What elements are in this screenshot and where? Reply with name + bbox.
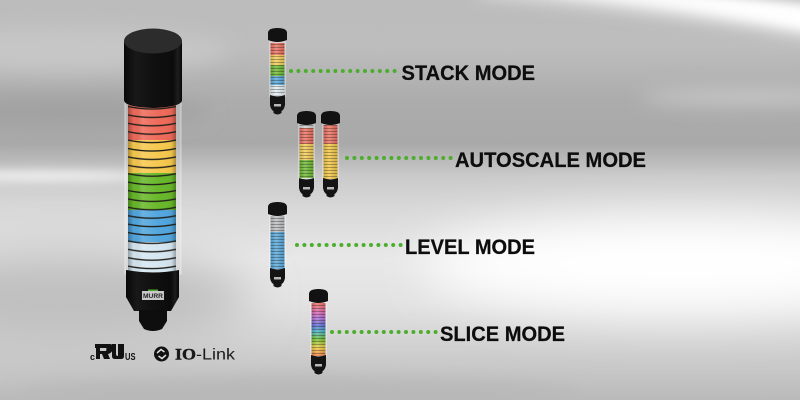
dotted leader: stack mode [291, 69, 396, 73]
wordmark: IO-Link [175, 346, 236, 364]
product: main signal tower [124, 28, 182, 331]
dotted leader: level mode [297, 243, 402, 247]
label: slice mode: SLICE MODE [440, 322, 565, 346]
logo: cULus certification [90, 344, 136, 363]
tower: autoscale mode, left [297, 111, 316, 198]
glass tube [125, 100, 181, 274]
dotted leader: autoscale mode [347, 156, 452, 160]
label: autoscale mode: AUTOSCALE MODE [455, 148, 646, 172]
label: level mode: LEVEL MODE [405, 235, 535, 259]
tower: stack mode [268, 28, 287, 114]
light segments [128, 105, 176, 272]
label: stack mode: STACK MODE [402, 61, 535, 85]
tower: level mode [268, 202, 287, 288]
cap [124, 28, 182, 108]
base and connector [126, 270, 179, 331]
brand label: MURR [143, 293, 163, 300]
tower: slice mode [309, 289, 328, 374]
tower: autoscale mode, right [321, 111, 340, 198]
logo: cULus certification: US [125, 352, 136, 363]
dotted leader: slice mode [332, 330, 437, 334]
logo: IO-Link [154, 346, 236, 364]
icon: IO-Link roundel [154, 346, 169, 362]
brand label [142, 290, 164, 300]
logo: cULus certification: c [90, 352, 95, 362]
